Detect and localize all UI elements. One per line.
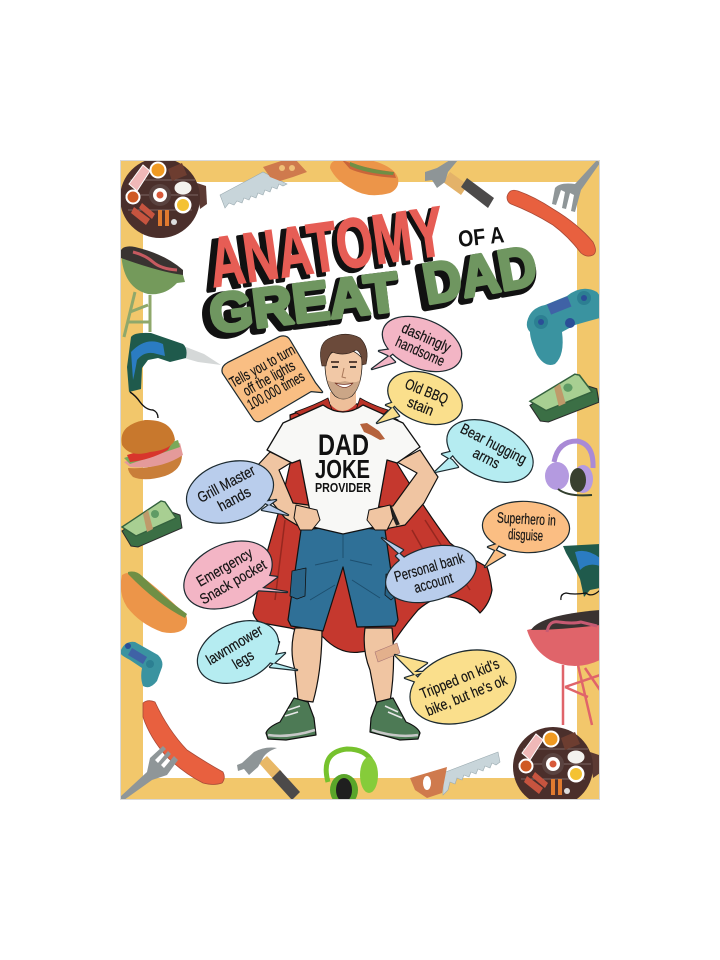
callout: tripped on kid's bike: bike, but he's ok (424, 672, 510, 720)
eyes (332, 366, 356, 368)
icon: hammer top (425, 160, 494, 208)
nose (342, 368, 346, 378)
cape folds (275, 520, 470, 600)
icon: drill left (127, 333, 221, 418)
icon: gamepad left (120, 642, 162, 687)
cape collar (295, 398, 388, 420)
shorts creases (310, 535, 380, 600)
icon: barbecue bottom-right (513, 727, 599, 799)
shoe soles and laces (268, 730, 418, 736)
title words: OF A: OF A (457, 221, 505, 252)
t-shirt (267, 405, 420, 534)
icon: money right (530, 374, 599, 422)
laces (285, 706, 402, 718)
poster (120, 158, 600, 807)
right shoe (370, 698, 420, 740)
callout: old BBQ stain (377, 362, 469, 434)
callout: bear hugging arms (435, 408, 542, 494)
icon: sausage and fork top right (507, 160, 600, 256)
icon: hot dog left (121, 572, 187, 633)
bandage (375, 643, 400, 662)
callout: grill master hands: Grill Master (195, 462, 258, 507)
icon: red grill (527, 610, 600, 725)
smile (335, 383, 353, 388)
callout: emergency snack pocket: Emergency (194, 545, 256, 590)
icon: saw bottom (410, 752, 500, 798)
title word: DAD: DAD (413, 236, 540, 321)
callout: dashingly handsome: handsome (393, 334, 447, 370)
icon: gamepad right (527, 289, 600, 365)
legs (292, 628, 394, 702)
shirt word: DAD: DAD (318, 429, 369, 462)
callout: grill master hands: hands (215, 484, 254, 515)
callout: lawnmower legs: lawnmower (203, 622, 266, 669)
icon: sausage and fork bottom (120, 701, 224, 800)
callout: tripped on kid's bike (395, 638, 525, 736)
callout: personal bank account: Personal bank (392, 550, 467, 586)
icon: hot dog top (330, 160, 398, 195)
title word: GREAT: GREAT (200, 262, 400, 349)
dad figure (253, 334, 492, 740)
title word: DAD: DAD (418, 234, 542, 317)
icon: hammer bottom (237, 748, 300, 800)
callout: old BBQ stain: Old BBQ (402, 376, 450, 408)
title word: ANATOMY: ANATOMY (204, 192, 449, 302)
callout: superhero in disguise: Superhero in (496, 509, 556, 530)
left leg (292, 628, 322, 702)
right leg (364, 628, 394, 702)
cape (253, 404, 492, 652)
icon: headset purple (545, 441, 593, 495)
shoes (266, 698, 420, 740)
title word: ANATOMY (197, 192, 449, 307)
icon: barbecue top-left (120, 158, 207, 238)
shorts (288, 526, 398, 631)
callout: superhero in disguise (482, 500, 570, 567)
callout: turn off the lights (223, 336, 322, 421)
face (325, 349, 362, 399)
shirt word: PROVIDER: PROVIDER (315, 480, 372, 495)
callout: tripped on kid's bike: Tripped on kid's (418, 656, 502, 703)
callout: turn off the lights: Tells you to turn (227, 342, 298, 391)
callout: turn off the lights: off the lights (240, 357, 298, 400)
title word: ANATOMY: ANATOMY (198, 195, 446, 307)
fists (294, 505, 393, 530)
callout: bear hugging arms: Bear hugging (457, 420, 529, 468)
icon: drill right (561, 544, 600, 600)
poster edge (120, 160, 600, 800)
callout: personal bank account: account (412, 569, 456, 597)
callout: lawnmower legs (188, 609, 297, 695)
icon: green grill (121, 246, 185, 337)
hair (320, 334, 367, 366)
wristband (390, 507, 398, 525)
callout: grill master hands (179, 451, 288, 533)
callout: emergency snack pocket: Snack pocket (197, 556, 270, 608)
callout: lawnmower legs: legs (230, 647, 257, 673)
callout: superhero in disguise: disguise (508, 526, 543, 545)
stubble (327, 380, 361, 400)
callout: turn off the lights: 100,000 times (244, 368, 308, 414)
icon: burger (121, 420, 183, 479)
shirt word: JOKE: JOKE (315, 454, 370, 484)
left arm (257, 452, 318, 530)
callout: emergency snack pocket (174, 528, 287, 622)
title word: GREAT: GREAT (206, 260, 402, 345)
yellow border frame (120, 160, 600, 800)
cargo pockets (290, 568, 399, 600)
neck (330, 392, 356, 411)
icon: saw top (220, 159, 307, 208)
icon: money left (122, 501, 182, 547)
shirt text: DAD JOKE PROVIDER (315, 429, 372, 495)
callout: personal bank account (380, 536, 482, 612)
right arm (368, 450, 438, 530)
callout: dashingly handsome: dashingly (399, 320, 454, 357)
left shoe (266, 698, 316, 740)
callout: dashingly handsome (372, 306, 469, 382)
head (320, 334, 367, 400)
bbq stain (360, 423, 385, 440)
eyebrows (331, 361, 357, 363)
callout: bear hugging arms: arms (470, 445, 502, 473)
title (197, 192, 542, 349)
callout: old BBQ stain: stain (405, 394, 436, 420)
icon: headset green (326, 749, 378, 806)
